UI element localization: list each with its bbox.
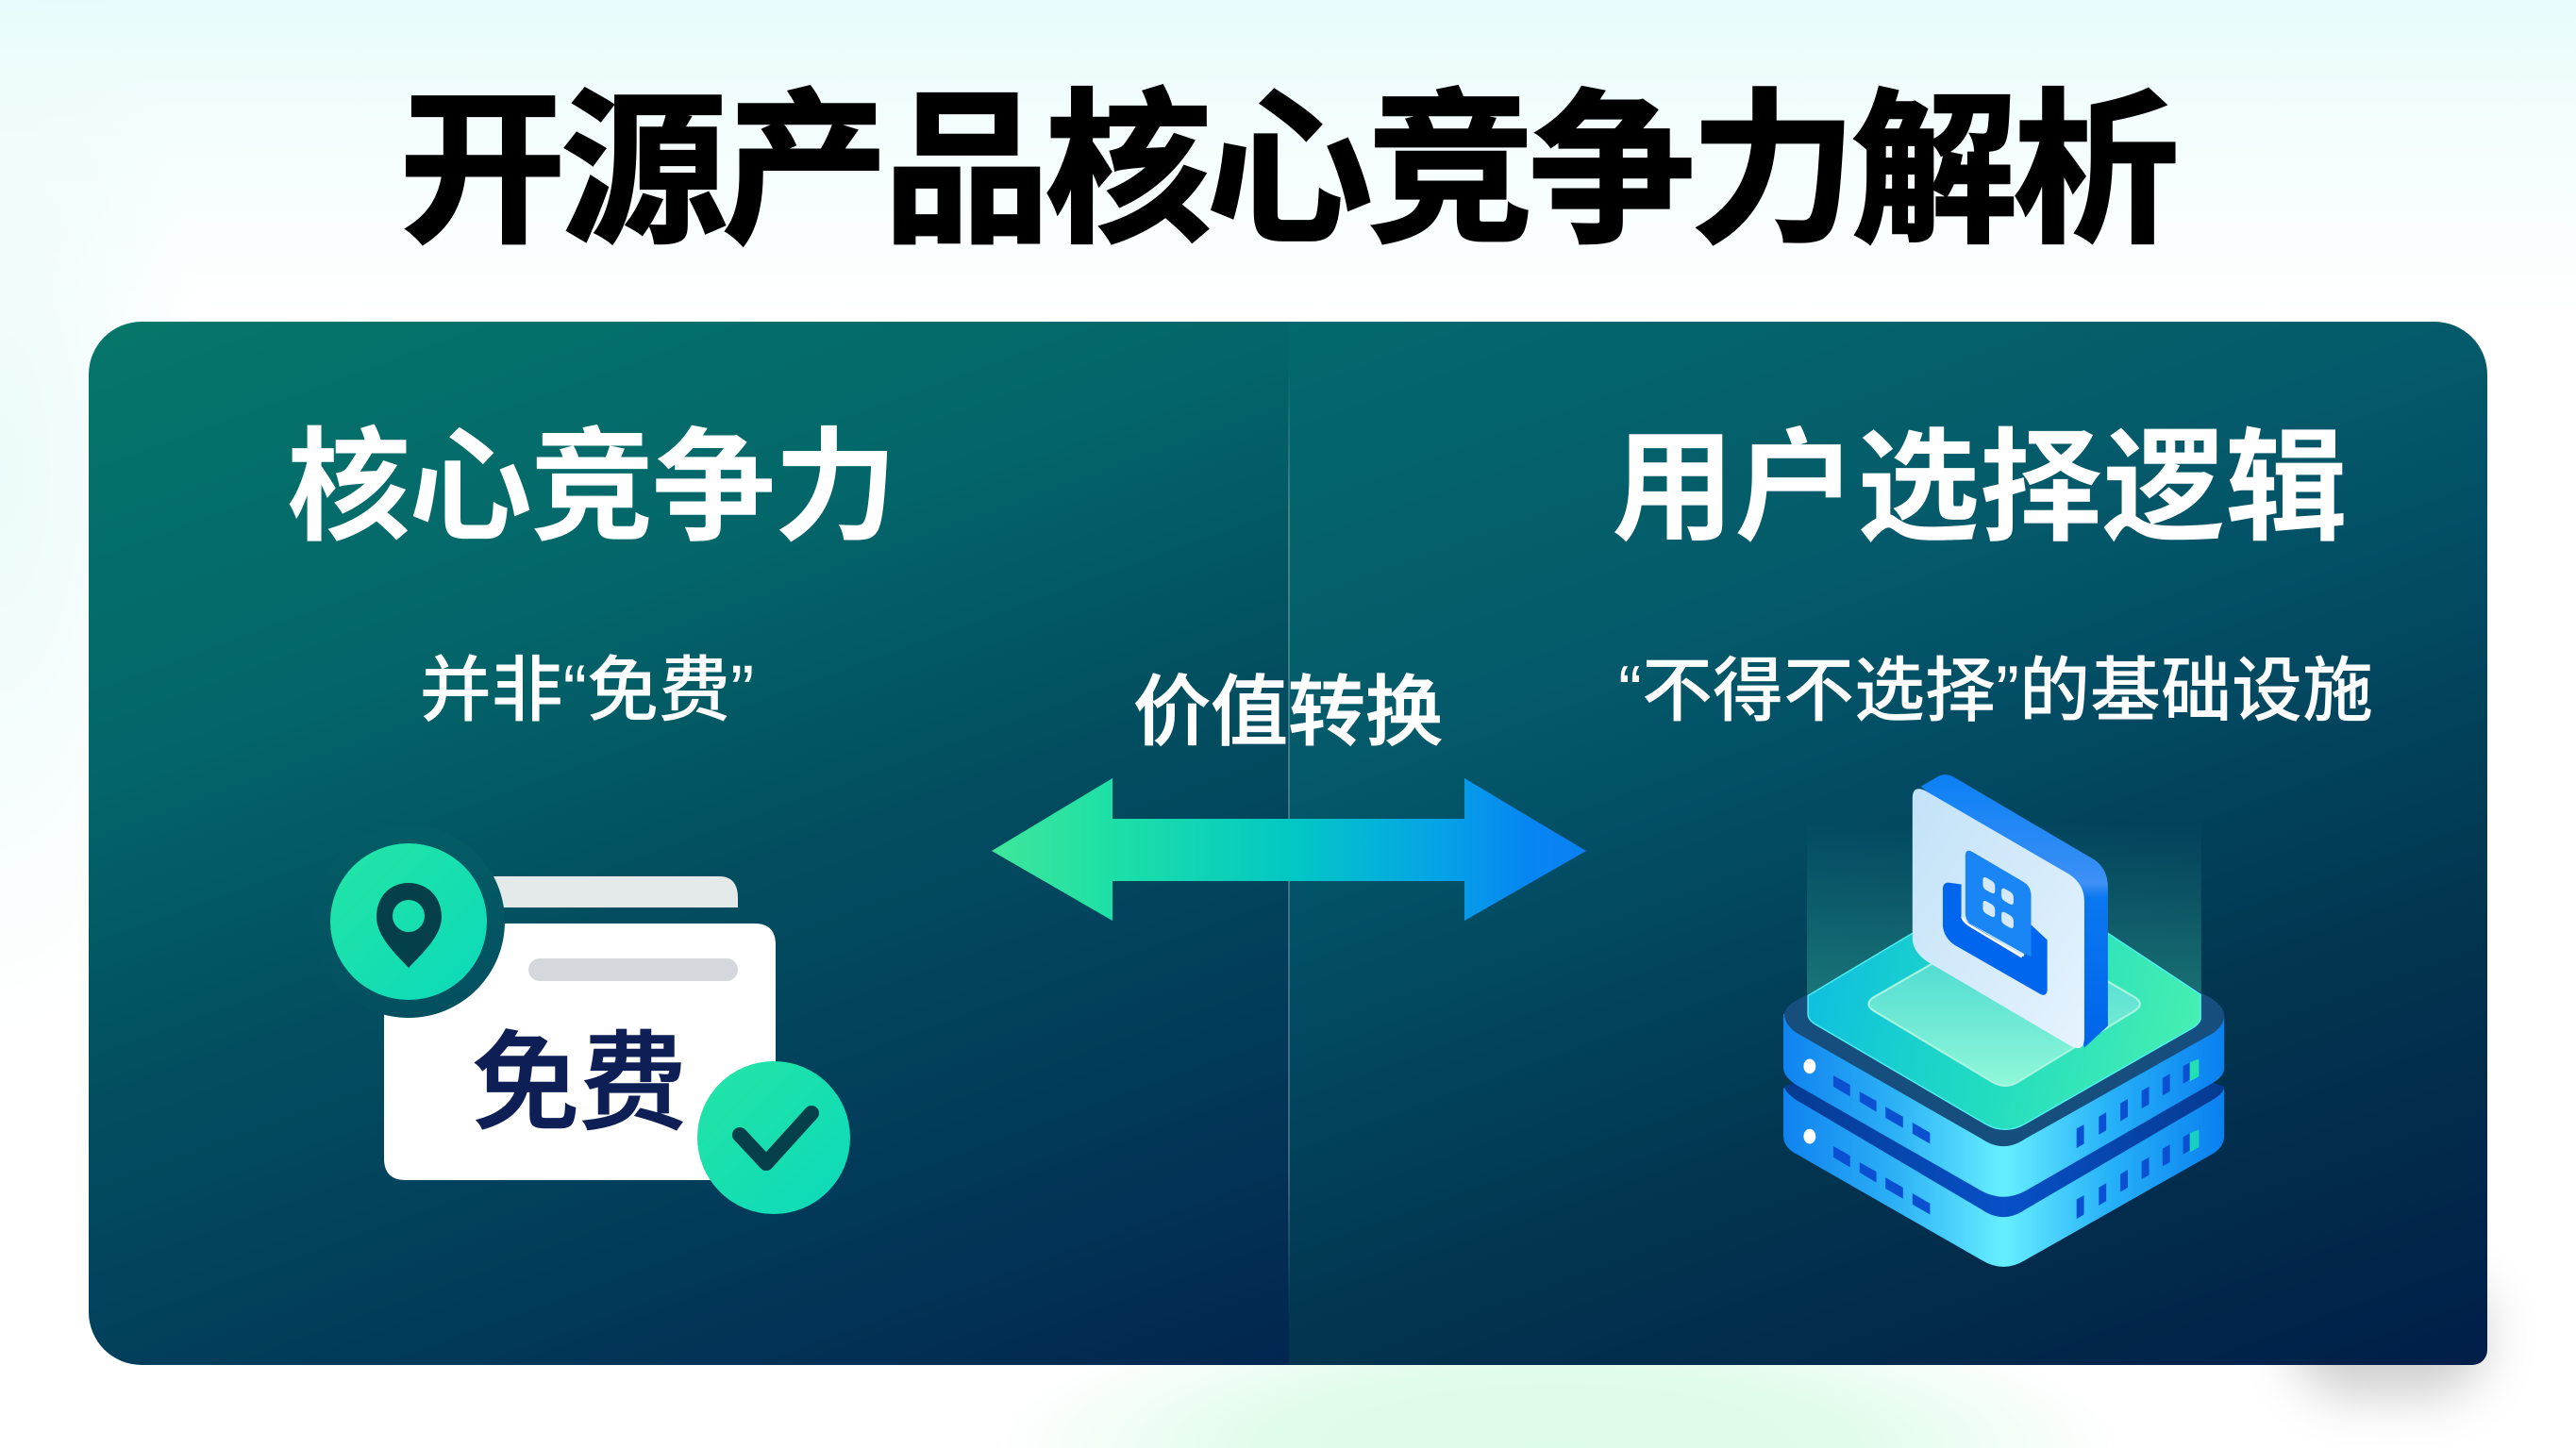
panel: main comparison (89, 322, 2487, 1365)
icon: check (740, 1113, 811, 1163)
card glyph: square (1965, 851, 2031, 957)
icon: free card (330, 843, 850, 1214)
floating card (1913, 774, 2108, 1048)
card glyph: tray (1943, 883, 2048, 995)
card glyph: dots (1982, 877, 2014, 928)
glow beam (1807, 822, 2201, 1004)
panel shadow (2293, 1273, 2486, 1396)
text: free: 免费 (472, 1024, 687, 1144)
check badge (697, 1061, 850, 1214)
pin badge (330, 843, 487, 1000)
label: value conversion: 价值转换 (1133, 670, 1443, 756)
main card (384, 924, 776, 1180)
heading: user choice logic: 用户选择逻辑 (1612, 419, 2348, 557)
card glyph: white edge (1962, 917, 2022, 957)
grey bar (528, 958, 738, 981)
center divider (1288, 364, 1290, 1317)
icon: server platform (1783, 774, 2225, 1267)
title: 开源产品核心竞争力解析 (399, 79, 2174, 264)
upper server (1783, 890, 2224, 1197)
green plate (1808, 933, 2200, 1129)
back card (472, 876, 738, 907)
icon: pin (376, 883, 442, 968)
lower server (1783, 1010, 2224, 1267)
text: infrastructure: “不得不选择”的基础设施 (1618, 651, 2373, 730)
heading: core competitiveness: 核心竞争力 (287, 418, 895, 557)
inner plate (1868, 927, 2140, 1086)
ring (312, 825, 505, 1018)
arrow: double-headed (992, 778, 1586, 921)
text: not free: 并非“免费” (420, 651, 754, 731)
